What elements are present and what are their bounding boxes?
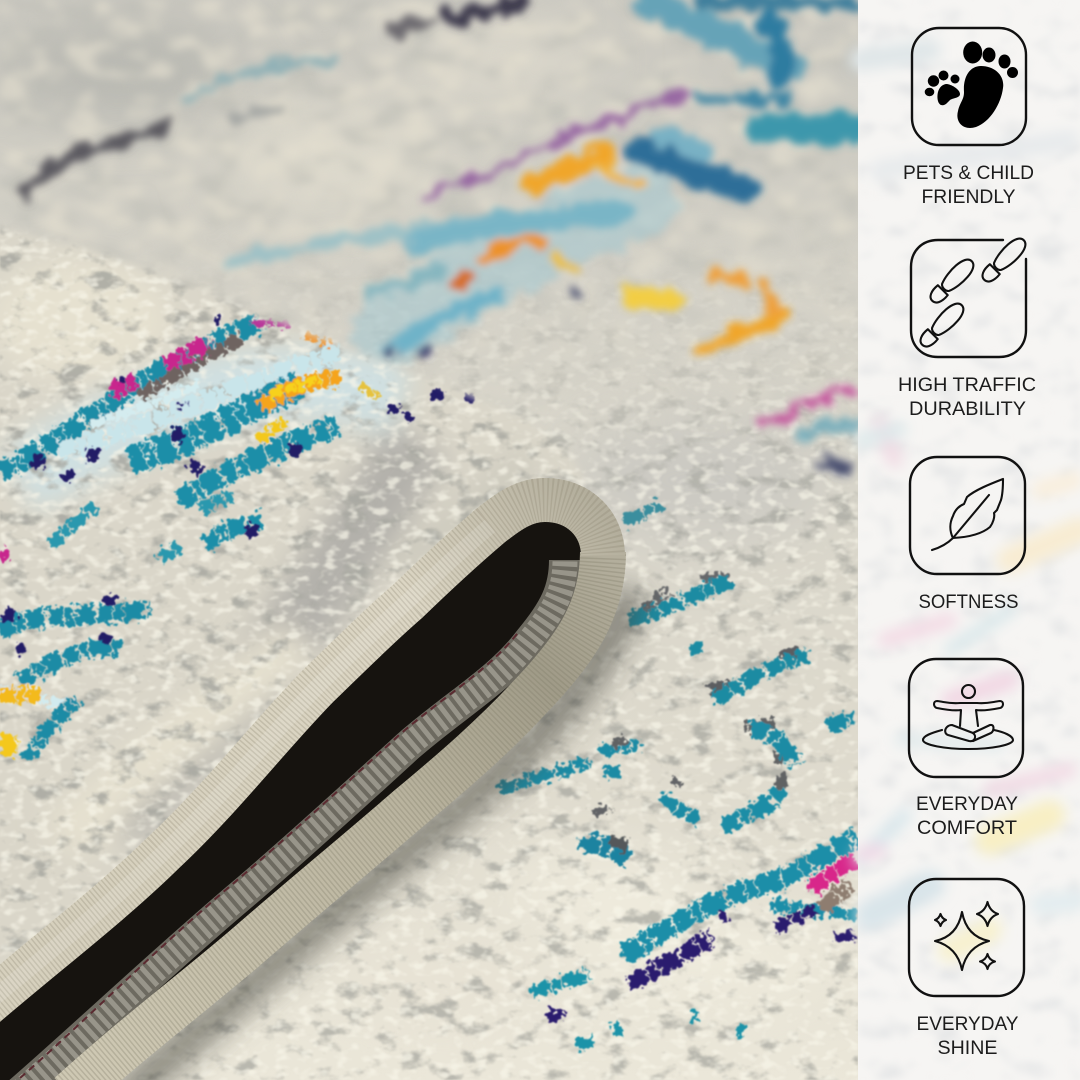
rolled rug: lower binding band xyxy=(70,552,603,1080)
floor tonal patches xyxy=(20,22,807,954)
rolled rug: top face xyxy=(0,227,553,964)
icon: everyday comfort meditation figure xyxy=(909,659,1023,777)
panel: faint pastel rug pattern xyxy=(860,50,1080,950)
label: everyday comfort: EVERYDAY xyxy=(916,794,1018,815)
panel: white feature sidebar xyxy=(858,0,1080,1080)
icon: softness feather xyxy=(910,457,1025,574)
label: everyday comfort xyxy=(916,794,1018,839)
rolled rug: upper binding band xyxy=(0,500,603,1010)
label: high traffic durability: DURABILITY xyxy=(909,399,1026,420)
label: pets and child friendly: PETS & CHILD xyxy=(903,163,1034,184)
label: pets and child friendly: FRIENDLY xyxy=(922,187,1016,208)
distant blurred pattern marks xyxy=(24,0,855,470)
shadow cast by the folded rug xyxy=(120,590,630,1080)
icon: pets and child footprints xyxy=(912,28,1026,145)
rolled rug: grey backing stitching xyxy=(20,560,565,1080)
label: high traffic durability: HIGH TRAFFIC xyxy=(898,375,1036,396)
label: softness: SOFTNESS xyxy=(918,592,1018,613)
icon: everyday shine sparkles xyxy=(909,879,1024,996)
label: everyday shine xyxy=(916,1014,1019,1059)
label: high traffic durability xyxy=(898,375,1036,420)
label: pets and child friendly xyxy=(903,163,1034,208)
floor: blurred distant mottling xyxy=(1,0,857,306)
near pattern marks on floor xyxy=(500,505,858,1045)
label: everyday shine: EVERYDAY xyxy=(916,1014,1019,1035)
floor: grey knit mottling xyxy=(148,302,858,1080)
navy speckles on rolled rug xyxy=(3,318,475,654)
label: everyday shine: SHINE xyxy=(938,1038,998,1059)
label: everyday comfort: COMFORT xyxy=(917,818,1017,839)
photo: rug background xyxy=(0,0,858,1080)
icon: high traffic footprints xyxy=(911,234,1030,357)
rolled rug: binding inner dark opening xyxy=(0,510,590,1080)
